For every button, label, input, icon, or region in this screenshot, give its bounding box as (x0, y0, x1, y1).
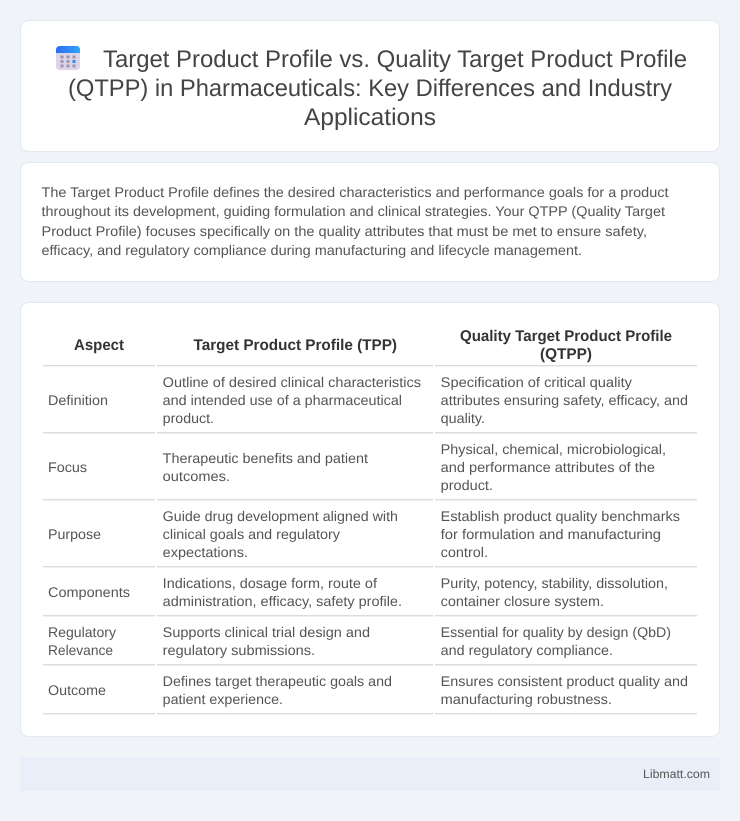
panel: comparison table (20, 302, 720, 736)
table row: Definition: quality. (441, 410, 485, 426)
text block: introduction paragraph: throughout its development, guiding formulation and clinical strategies. Your QTPP (Quality Target (42, 203, 665, 219)
table row: Purpose: Guide drug development aligned with (163, 508, 398, 524)
table header row: Aspect (74, 337, 124, 354)
panel: introduction (20, 162, 720, 282)
panel: title card (20, 20, 720, 152)
table row: Outcome: manufacturing robustness. (441, 691, 612, 707)
table row: Components (48, 575, 668, 609)
heading: title: Applications (304, 104, 436, 131)
table row: Regulatory Relevance: and regulatory compliance. (441, 642, 613, 658)
heading: title: Target Product Profile vs. Quality Target Product Profile (103, 46, 687, 73)
table row: Components: container closure system. (441, 593, 604, 609)
table row: Definition: and intended use of a pharmaceutical (163, 392, 402, 408)
table row: Purpose: Purpose (48, 526, 101, 542)
text block: introduction paragraph (42, 184, 669, 258)
table header row (74, 328, 672, 363)
table row: Outcome: Outcome (48, 682, 106, 698)
table row: Components: Indications, dosage form, route of (163, 575, 377, 591)
table row: Definition: attributes ensuring safety, efficacy, and (441, 392, 688, 408)
text block: introduction paragraph: Product Profile) focuses specifically on the quality attributes that must be met to ensure safety, (42, 223, 647, 239)
table header row: Quality Target Product Profile (460, 328, 672, 345)
heading: title (68, 46, 687, 131)
table row: Regulatory Relevance: Supports clinical trial design and (163, 624, 370, 640)
table row: Outcome: Defines target therapeutic goals and (163, 673, 392, 689)
table row: Outcome (48, 673, 688, 707)
table header row: Target Product Profile (TPP) (194, 337, 397, 354)
table row: Regulatory Relevance: Relevance (48, 642, 113, 658)
table row: Focus: Focus (48, 459, 87, 475)
table row: Definition: Specification of critical quality (441, 374, 632, 390)
table row: Definition: Definition (48, 392, 108, 408)
table row: Regulatory Relevance: Regulatory (48, 624, 116, 640)
table row: Regulatory Relevance: Essential for quality by design (QbD) (441, 624, 671, 640)
table row: Focus: and performance attributes of the (441, 459, 655, 475)
table row: Focus: product. (441, 477, 493, 493)
table row: Focus: Physical, chemical, microbiological, (441, 441, 666, 457)
table row: Components: Components (48, 584, 130, 600)
table row: Purpose: expectations. (163, 544, 248, 560)
table row: Outcome: patient experience. (163, 691, 283, 707)
table row: Components: administration, efficacy, safety profile. (163, 593, 402, 609)
table row: Definition: Outline of desired clinical characteristics (163, 374, 421, 390)
table row: Purpose (48, 508, 680, 560)
table row: Focus: Therapeutic benefits and patient (163, 450, 368, 466)
footer (20, 757, 720, 791)
heading: title: (QTPP) in Pharmaceuticals: Key Differences and Industry (68, 75, 672, 102)
table row: Purpose: Establish product quality benchmarks (441, 508, 680, 524)
table row: Purpose: clinical goals and regulatory (163, 526, 340, 542)
table row: Focus (48, 441, 666, 493)
text block: introduction paragraph: The Target Product Profile defines the desired characteristics and performance goals for a product (42, 184, 669, 200)
table row: Outcome: Ensures consistent product quality and (441, 673, 688, 689)
table row: Regulatory Relevance: regulatory submissions. (163, 642, 315, 658)
table header row: (QTPP) (540, 346, 592, 363)
table row: Definition (48, 374, 688, 426)
footer credit: Libmatt.com (643, 767, 710, 781)
table row: Focus: outcomes. (163, 468, 230, 484)
table row: Regulatory Relevance (48, 624, 671, 658)
icon: calendar (56, 46, 80, 70)
table row: Purpose: for formulation and manufacturing (441, 526, 661, 542)
table row: Purpose: control. (441, 544, 488, 560)
table row: Definition: product. (163, 410, 214, 426)
text block: introduction paragraph: efficacy, and regulatory compliance during manufacturing and lifecycle management. (42, 242, 582, 258)
table row: Components: Purity, potency, stability, dissolution, (441, 575, 668, 591)
